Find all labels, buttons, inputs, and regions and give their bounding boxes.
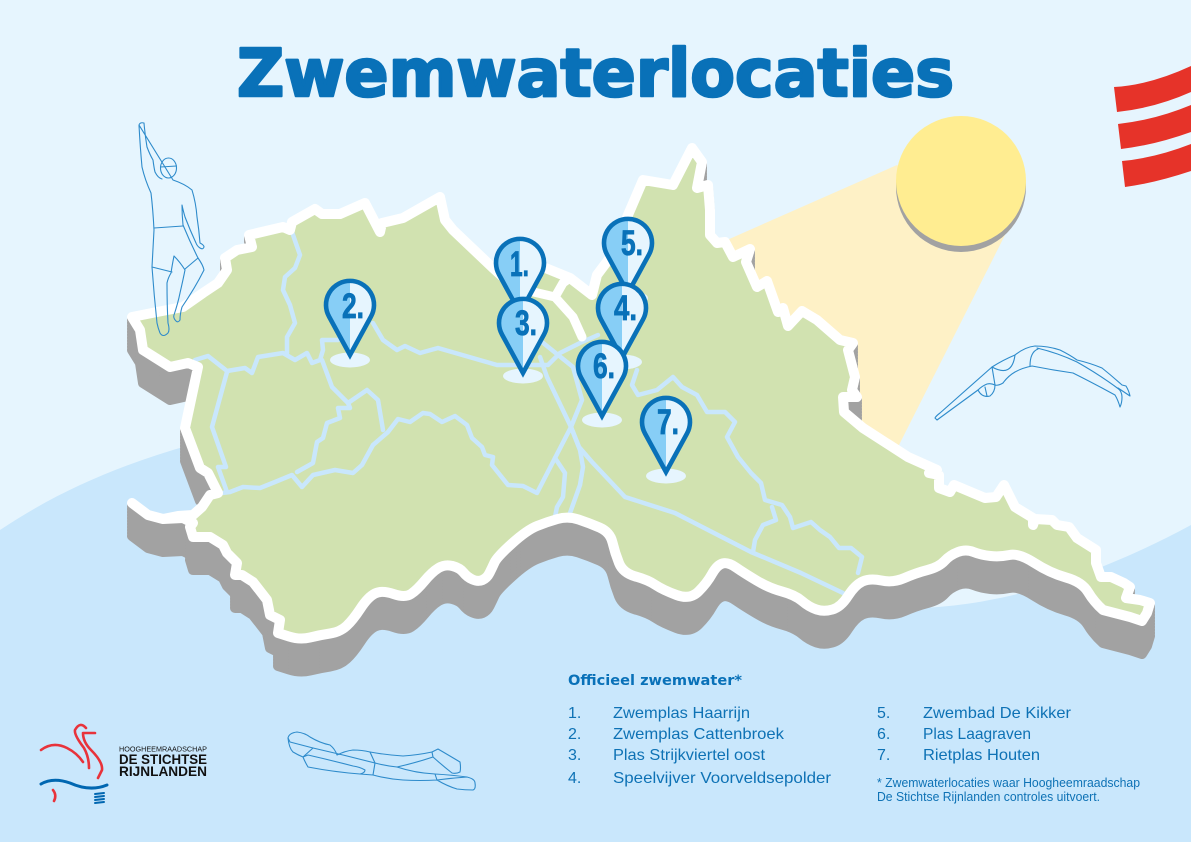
legend list right: 7.: [877, 747, 890, 764]
pin 1: 1.: [510, 245, 529, 284]
pin 5: [604, 219, 652, 306]
logo wordmark: HOOGHEEMRAADSCHAP: [119, 744, 207, 754]
legend list left: 1.: [568, 705, 581, 722]
waterways: [195, 232, 862, 593]
legend list left: 4.: [568, 770, 581, 787]
pin 6: 6.: [593, 347, 615, 386]
logo wordmark: [119, 744, 207, 779]
legend list left: [568, 705, 832, 787]
logo wordmark: RIJNLANDEN: [119, 763, 207, 779]
legend list left: 3.: [568, 747, 581, 764]
legend: [568, 673, 1140, 804]
legend list left: 2.: [568, 726, 581, 743]
pin 2: 2.: [342, 287, 364, 326]
legend list left: Zwemplas Haarrijn: [613, 705, 750, 722]
legend list right: 6.: [877, 726, 890, 743]
map land: [132, 148, 1150, 639]
map 3D shadow: [132, 151, 1150, 672]
pin 7: [642, 398, 690, 484]
map white border: [132, 148, 1150, 639]
pin 6: [578, 342, 626, 428]
logo: De Stichtse Rijnlanden: [41, 725, 207, 803]
logo wordmark: DE STICHTSE: [119, 751, 207, 767]
pin 5: 5.: [621, 224, 643, 263]
legend list right: [877, 705, 1072, 764]
legend list left: Zwemplas Cattenbroek: [613, 726, 785, 743]
figure: diving swimmer: [935, 346, 1130, 420]
sun beam: [727, 165, 1005, 470]
legend list right: Zwembad De Kikker: [923, 705, 1072, 722]
map: [132, 148, 1150, 672]
pin 4: [598, 284, 646, 370]
footnote: [877, 776, 1140, 804]
legend list right: 5.: [877, 705, 890, 722]
legend list left: Plas Strijkviertel oost: [613, 747, 766, 764]
legend list right: Rietplas Houten: [923, 747, 1040, 764]
red flag stripes: [1114, 66, 1191, 187]
figure: standing swimmer: [139, 123, 204, 336]
sun: [896, 116, 1026, 252]
pin 4: 4.: [614, 289, 637, 328]
title: Zwemwaterlocaties: [237, 35, 954, 112]
legend list left: Speelvijver Voorveldsepolder: [613, 770, 832, 787]
pin 7: 7.: [657, 403, 679, 442]
pin 1: [496, 239, 544, 324]
footnote: De Stichtse Rijnlanden controles uitvoert.: [877, 790, 1100, 804]
footnote: * Zwemwaterlocaties waar Hoogheemraadschap: [877, 776, 1140, 790]
legend heading: Officieel zwemwater*: [568, 673, 743, 689]
pin 2: [326, 281, 374, 368]
pin 3: 3.: [515, 304, 537, 343]
legend list right: Plas Laagraven: [923, 726, 1031, 743]
pin 3: [499, 299, 547, 384]
figure: floating swimmer: [288, 732, 475, 790]
logo swan icon: [41, 725, 107, 803]
